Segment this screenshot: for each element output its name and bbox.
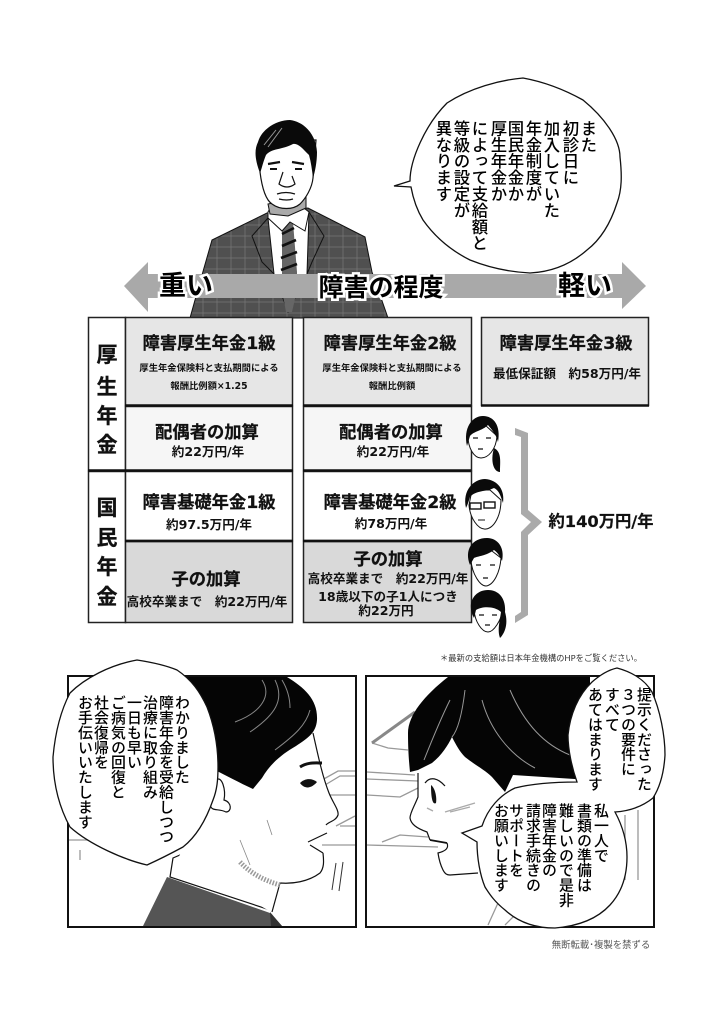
speech bubble: top explanation: によって支給額と xyxy=(469,120,488,251)
pension table xyxy=(88,318,649,622)
row header: employees pension: 年 xyxy=(96,404,118,428)
cell: basic pension grade 1 xyxy=(126,472,292,540)
icon: husband face with glasses xyxy=(465,479,503,529)
suit xyxy=(143,877,282,926)
cell: employees pension grade 1 xyxy=(126,318,292,406)
panel: woman in profile xyxy=(366,668,665,928)
text: support request: お願いします xyxy=(492,803,508,893)
cell: employees pension grade 1: 障害厚生年金1級 xyxy=(142,333,276,354)
cell: employees pension grade 1: 厚生年金保険料と支払期間による xyxy=(139,362,279,374)
frame xyxy=(68,676,356,927)
cell: spouse addition, grade 2: 配偶者の加算 xyxy=(339,422,443,443)
row header: national pension: 国 xyxy=(96,496,118,520)
cell: employees pension grade 2: 報酬比例額 xyxy=(369,380,416,392)
cell: basic pension grade 2 xyxy=(304,472,472,540)
speech bubble: man's reply: 一日も早い xyxy=(125,695,141,770)
text: support request xyxy=(492,803,608,909)
speech bubble: top explanation: また xyxy=(578,120,596,153)
cell: spouse addition, grade 2: 約22万円/年 xyxy=(357,444,430,459)
speech bubble: man's reply: 社会復帰を xyxy=(92,695,108,770)
footnote: latest amounts: ＊最新の支給額は日本年金機構のHPをご覧ください。 xyxy=(440,653,642,663)
text: requirements confirmed: すべて xyxy=(603,687,619,732)
icon: son face xyxy=(468,538,503,586)
bracket: household total xyxy=(515,428,654,623)
cell: child addition, grade 2: 子の加算 xyxy=(353,549,423,570)
cell: basic pension grade 2: 障害基礎年金2級 xyxy=(324,492,456,513)
cell: child addition, grade 2: 約22万円 xyxy=(358,603,414,618)
row header: national pension: 年 xyxy=(96,555,118,579)
text: support request: 障害年金の xyxy=(540,803,556,878)
speech bubble: top explanation: 異なります xyxy=(433,120,452,202)
speech bubble: top explanation: 国民年金か xyxy=(505,120,524,202)
text: requirements confirmed: ３つの要件に xyxy=(619,687,635,777)
text: support request: サポートを xyxy=(507,803,523,878)
cell: basic pension grade 1: 障害基礎年金1級 xyxy=(142,492,276,513)
speech bubbles: woman's lines xyxy=(462,668,665,928)
text: requirements confirmed: 提示くださった xyxy=(635,687,651,792)
speech bubble: top explanation: 年金制度が xyxy=(523,120,542,202)
cell: spouse addition, grade 1: 約22万円/年 xyxy=(172,444,245,459)
text: support request: 私一人で xyxy=(592,803,608,863)
cell: spouse addition, grade 1 xyxy=(126,406,292,470)
speech bubble: top explanation xyxy=(394,78,621,273)
row header: national pension: 民 xyxy=(96,526,118,550)
cell: child addition, grade 1: 子の加算 xyxy=(171,569,241,590)
row header: employees pension xyxy=(88,318,126,470)
cell: employees pension grade 3 xyxy=(482,318,648,406)
speech bubble: top explanation: 初診日に xyxy=(560,120,579,186)
text: support request: 書類の準備は xyxy=(575,803,591,893)
cell: basic pension grade 1: 約97.5万円/年 xyxy=(166,517,252,532)
row header: employees pension: 厚 xyxy=(96,343,118,367)
cell: employees pension grade 2: 障害厚生年金2級 xyxy=(324,333,456,354)
cell: child addition, grade 2 xyxy=(304,542,472,622)
cell: child addition, grade 2: 高校卒業まで 約22万円/年 xyxy=(308,571,469,586)
illustration: man in a suit xyxy=(190,120,388,318)
speech bubble: man's reply: 障害年金を受給しつつ xyxy=(157,695,173,844)
speech bubble: top explanation: 加入していた xyxy=(541,120,560,218)
cell: child addition, grade 1 xyxy=(126,542,292,622)
frame xyxy=(366,676,654,927)
hair xyxy=(408,677,590,792)
speech bubble: man's reply: お手伝いいたします xyxy=(76,695,92,829)
label: light: 軽い xyxy=(558,271,612,302)
face xyxy=(178,733,338,912)
speech bubble: man's reply: 治療に取り組み xyxy=(141,695,157,800)
cell: child addition, grade 2: 18歳以下の子1人につき xyxy=(318,589,458,604)
icon: daughter face xyxy=(471,590,506,638)
text: support request: 請求手続きの xyxy=(524,803,540,892)
row header: employees pension: 金 xyxy=(96,433,118,457)
speech bubble: top explanation: 厚生年金か xyxy=(488,120,507,202)
cell: spouse addition, grade 1: 配偶者の加算 xyxy=(155,422,259,443)
text: support request: 難しいので是非 xyxy=(557,803,573,909)
label: degree of disability: 障害の程度 xyxy=(318,273,444,302)
panel: man in profile xyxy=(53,660,356,927)
text: requirements confirmed xyxy=(586,687,651,792)
label: heavy: 重い xyxy=(159,271,213,302)
cell: employees pension grade 3: 障害厚生年金3級 xyxy=(500,333,632,354)
cell: spouse addition, grade 2 xyxy=(304,406,472,470)
total amount: 約140万円/年 xyxy=(548,512,654,531)
hair xyxy=(180,677,317,789)
copyright notice: 無断転載･複製を禁ずる xyxy=(552,939,650,951)
speech bubble: top explanation: 等級の設定が xyxy=(451,120,470,218)
text: requirements confirmed: あてはまります xyxy=(586,687,602,792)
row header: national pension xyxy=(88,472,126,622)
icon: wife face xyxy=(466,416,500,472)
cell: basic pension grade 2: 約78万円/年 xyxy=(355,516,428,531)
cell: employees pension grade 3: 最低保証額 約58万円/年 xyxy=(493,366,641,381)
cell: child addition, grade 1: 高校卒業まで 約22万円/年 xyxy=(127,594,288,609)
cell: employees pension grade 2 xyxy=(304,318,472,406)
cell: employees pension grade 1: 報酬比例額×1.25 xyxy=(170,380,248,392)
speech bubble: man's reply: わかりました xyxy=(173,695,189,785)
double arrow: severity scale xyxy=(124,262,646,312)
row header: employees pension: 生 xyxy=(96,375,118,399)
speech bubble: man's reply xyxy=(53,660,218,865)
row header: national pension: 金 xyxy=(96,585,118,609)
cell: employees pension grade 2: 厚生年金保険料と支払期間による xyxy=(322,362,462,374)
face xyxy=(410,740,500,875)
speech bubble: man's reply: ご病気の回復と xyxy=(109,695,125,799)
